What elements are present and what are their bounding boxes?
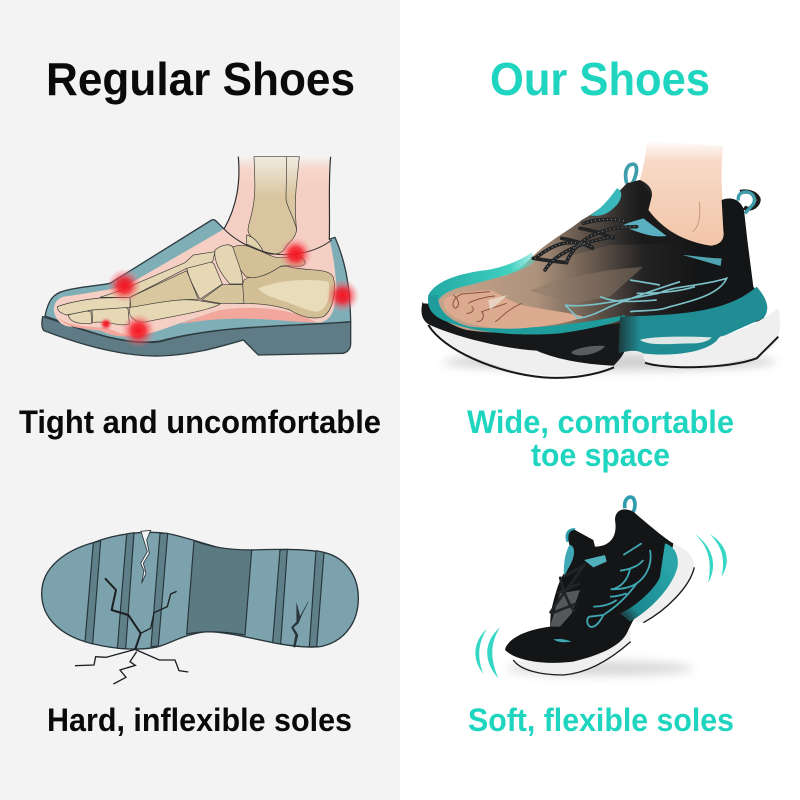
black shoe body — [505, 509, 673, 663]
navicular — [215, 245, 243, 284]
insole pressure band — [58, 308, 317, 336]
caption: Wide, comfortable toe space: toe space — [531, 437, 670, 473]
pain spot: small toe — [99, 317, 113, 331]
laces — [550, 563, 585, 613]
motion arcs left — [475, 627, 500, 678]
shadow — [507, 661, 693, 676]
teal logo — [564, 545, 574, 577]
heel pull loop teal — [738, 192, 754, 213]
heel pull loop — [740, 192, 759, 209]
motion arcs right — [695, 534, 727, 583]
white sole rear — [643, 308, 780, 367]
white sole rear — [628, 543, 694, 623]
pain spot: joint bottom — [121, 313, 156, 348]
panel: our shoes background — [400, 0, 800, 800]
toe arrows — [488, 295, 507, 310]
fibula line — [286, 157, 297, 230]
heel accent — [683, 255, 722, 266]
wing pattern lines — [565, 278, 727, 318]
caption: Soft, flexible soles: Soft, flexible soles — [468, 702, 734, 738]
grey lace panel — [550, 590, 580, 627]
tan wing panel — [530, 267, 643, 303]
black air unit — [572, 346, 605, 355]
metatarsal middle — [130, 271, 198, 308]
shoe upper — [45, 220, 351, 342]
toe accent — [553, 639, 572, 642]
small toes — [57, 297, 130, 315]
black outsole rear — [645, 337, 778, 367]
cuneiform — [187, 261, 222, 299]
collar accent — [584, 555, 607, 567]
shoe sole — [42, 317, 351, 356]
main crack — [105, 578, 141, 650]
white sole front — [513, 630, 631, 675]
foot inside the shoe — [443, 290, 583, 329]
white sole front — [428, 324, 615, 375]
heading: Our Shoes: Our Shoes — [490, 53, 710, 105]
ground shadow — [443, 353, 777, 370]
pain spot: ankle — [279, 237, 312, 271]
tongue pull loop — [626, 164, 637, 183]
caption: Tight and uncomfortable: Tight and uncomfortable — [19, 404, 381, 440]
dark midsole — [421, 302, 630, 366]
cuboid — [202, 285, 244, 303]
big toe tip — [68, 311, 92, 324]
tongue loop — [567, 530, 575, 542]
metatarsals upper — [100, 252, 215, 297]
talus — [232, 245, 305, 278]
heel pull loop — [625, 497, 635, 512]
air unit — [640, 337, 712, 344]
caption: Hard, inflexible soles: Hard, inflexible soles — [47, 702, 352, 738]
wing pattern — [587, 543, 651, 627]
sole shape — [42, 532, 358, 649]
illustration: transparent sneaker with foot — [421, 141, 780, 378]
pain spot: toe top — [107, 268, 142, 303]
big toe phalanx — [92, 307, 129, 325]
toe lines — [453, 292, 522, 322]
lace speckle — [535, 219, 637, 270]
heel bone highlight — [258, 280, 329, 312]
leg outlines — [224, 157, 331, 240]
tread bands — [85, 533, 324, 649]
sneaker upper — [430, 180, 767, 333]
tibia and fibula — [248, 157, 299, 254]
teal tongue logo — [590, 188, 621, 216]
illustration: flexing sneaker — [475, 497, 727, 678]
crack branches — [75, 591, 188, 684]
illustration: cracked hard sole — [42, 530, 358, 684]
caption: Wide, comfortable toe space: Wide, comfortable — [467, 404, 734, 440]
teal liner around toes — [428, 295, 625, 335]
teal midsole — [620, 543, 678, 622]
laces — [533, 219, 637, 270]
illustration: foot skeleton in tight shoe — [42, 157, 359, 356]
panel: regular shoes background — [0, 0, 400, 800]
collar outline — [224, 229, 332, 255]
arch section — [187, 541, 252, 635]
ankle crease — [693, 202, 700, 232]
top crack gap — [141, 530, 151, 583]
leg skin — [640, 141, 727, 252]
collar accent — [622, 218, 667, 236]
right crack gap — [291, 602, 308, 647]
heading: Regular Shoes: Regular Shoes — [46, 53, 355, 105]
first metatarsal — [129, 300, 220, 322]
teal midsole — [618, 287, 767, 355]
dark lace area overlay — [534, 180, 677, 263]
heel bone — [237, 266, 335, 318]
pain spot: heel — [326, 279, 359, 312]
foot and leg skin — [54, 157, 337, 336]
teal toe cap — [428, 253, 535, 307]
black sole edge rear — [643, 567, 694, 623]
black outsole front — [428, 325, 614, 378]
black sole edge front — [513, 642, 631, 675]
ankle small bone — [247, 235, 263, 252]
